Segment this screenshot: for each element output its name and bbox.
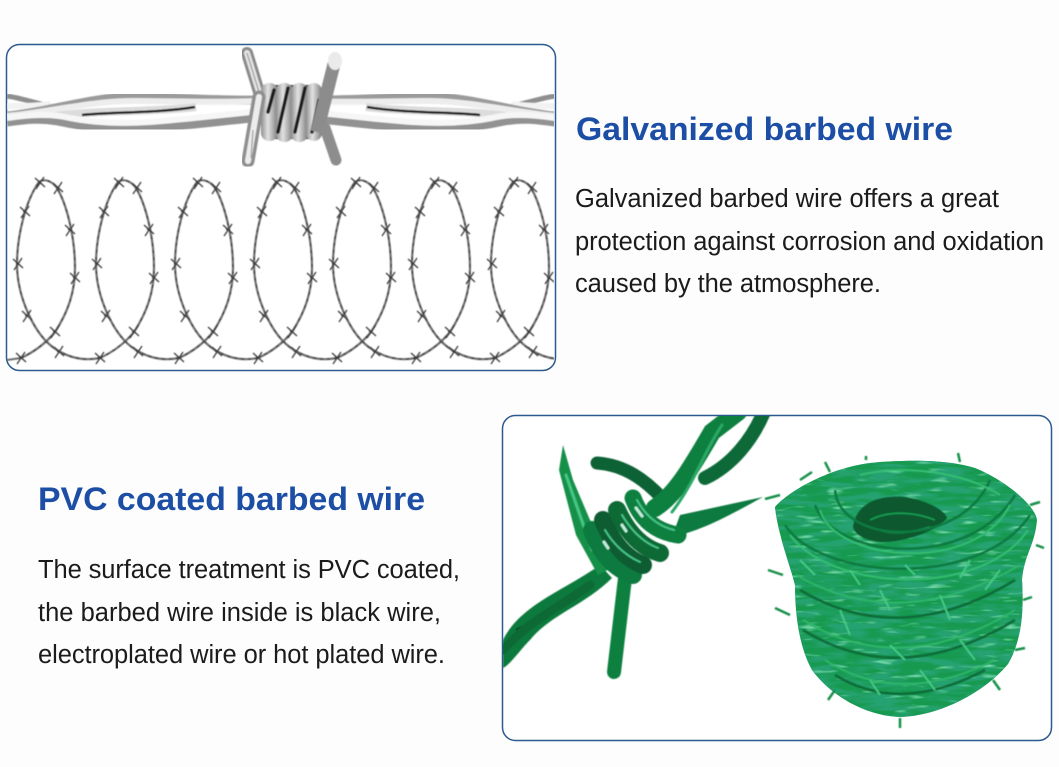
text block: galvanized description: protection against corrosion and oxidation: [575, 228, 1044, 256]
text block: PVC description: the barbed wire inside is black wire,: [38, 599, 441, 627]
text block: galvanized description: [575, 185, 1044, 298]
panel: PVC coated barbed wire illustration: [502, 412, 1052, 740]
heading: galvanized barbed wire: Galvanized barbed wire: [576, 111, 953, 147]
text block: PVC description: [38, 556, 460, 669]
text block: PVC description: electroplated wire or hot plated wire.: [38, 641, 445, 669]
text block: galvanized description: caused by the atmosphere.: [575, 270, 881, 298]
text block: PVC description: The surface treatment is PVC coated,: [38, 556, 460, 584]
text block: galvanized description: Galvanized barbed wire offers a great: [575, 185, 999, 213]
icon: green barbed wire roll: [765, 453, 1044, 728]
panel: galvanized barbed wire illustration: [6, 44, 574, 370]
straight barbed wire strands: [7, 96, 555, 128]
heading: PVC coated barbed wire: PVC coated barbed wire: [38, 481, 425, 517]
icon: barb knot with four coil turns: [247, 52, 342, 161]
razor wire loops: [7, 177, 574, 364]
icon: green barbed wire close-up: [503, 412, 764, 672]
